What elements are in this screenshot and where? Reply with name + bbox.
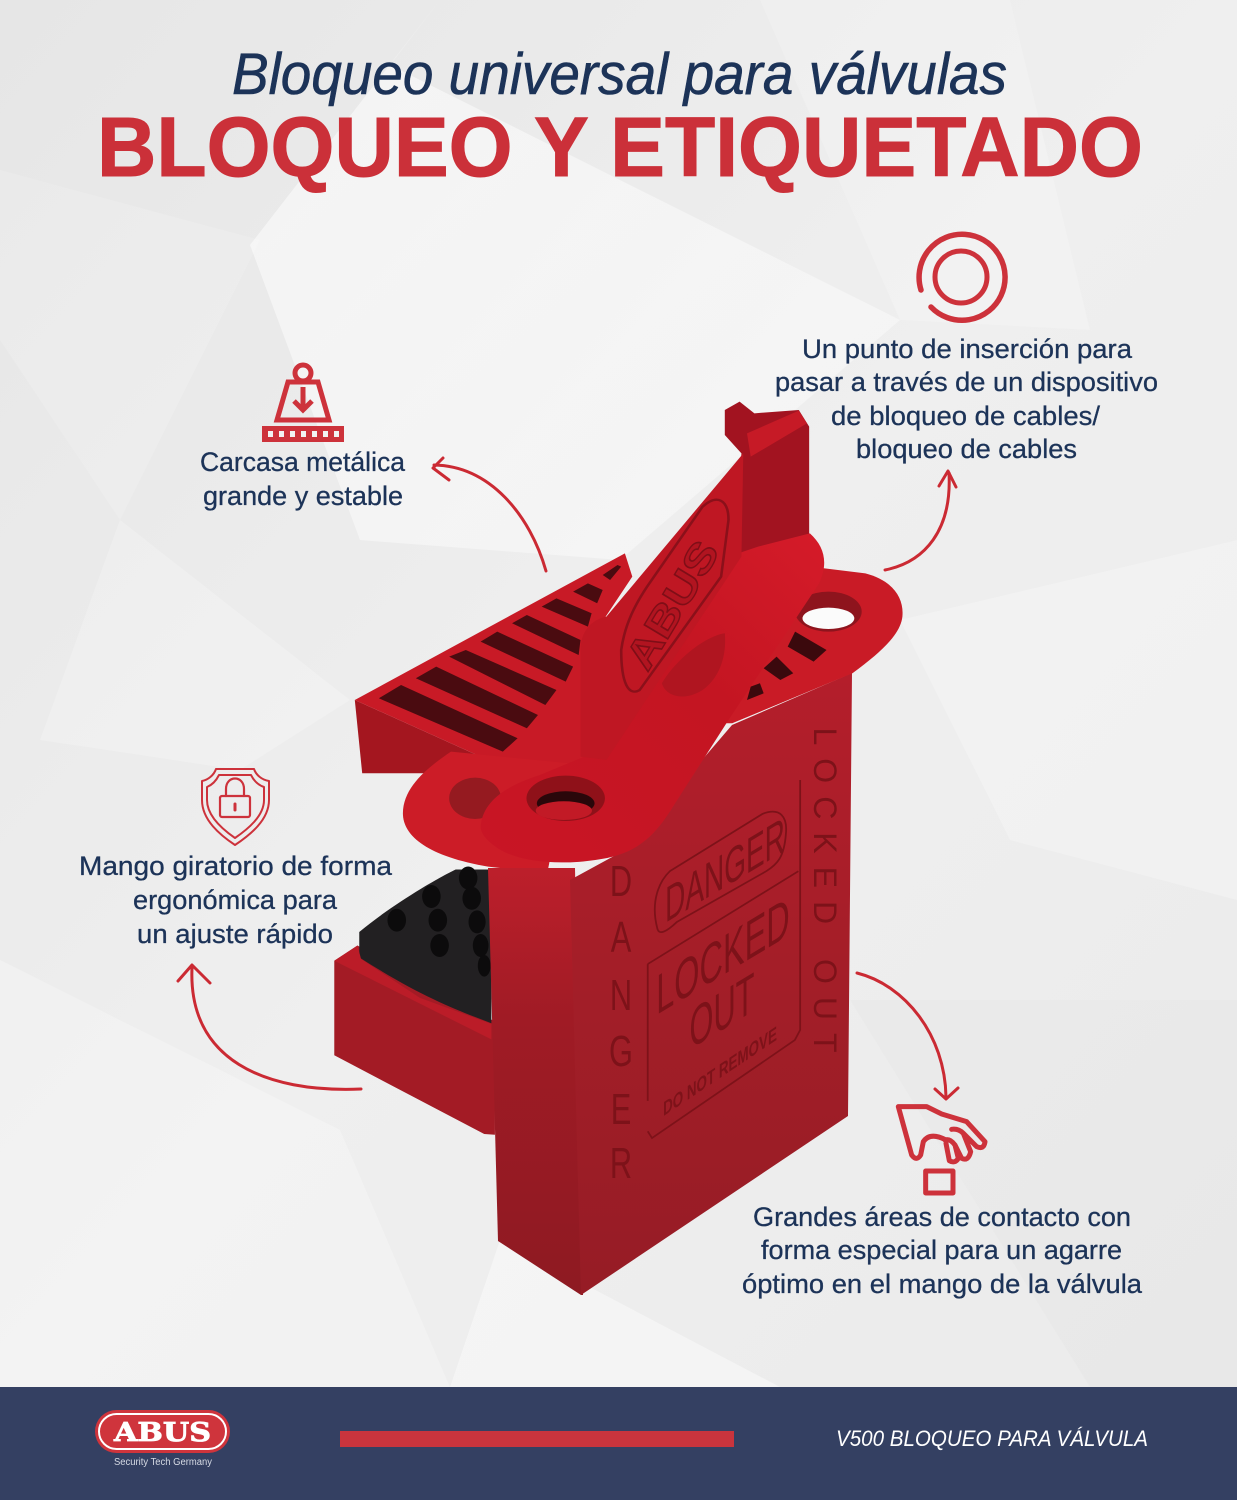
embossed body text: DO NOT REMOVE [663, 1022, 777, 1121]
insertion point text: bloqueo de cables [856, 434, 1077, 464]
ABUS logo [95, 1410, 230, 1468]
icon: concentric rings [919, 234, 1005, 320]
arrow: to insertion point text [885, 471, 956, 570]
ergonomic handle text: ergonómica para [133, 885, 338, 915]
main body side face [488, 868, 583, 1295]
insertion point text: Un punto de inserción para [802, 334, 1133, 364]
rear grid plate [355, 553, 632, 873]
title [97, 42, 1143, 194]
embossed body text: LOCKED [656, 886, 790, 1028]
embossed body text: LOCKED OUT [807, 728, 843, 1052]
title line 2: BLOQUEO Y ETIQUETADO [97, 100, 1143, 194]
arrow: to metal housing text [433, 458, 546, 571]
icon: weight on base [262, 365, 344, 442]
callout: bottom right [742, 1107, 1143, 1299]
embossed body text: A [611, 914, 632, 962]
embossed body text [609, 728, 843, 1188]
embossed panel [648, 780, 800, 1138]
icon: shield with padlock [202, 769, 269, 845]
black rubber grip and base block [334, 866, 495, 1135]
ergonomic handle text [79, 851, 393, 949]
handle blade [580, 453, 743, 760]
embossed body text: N [610, 972, 632, 1020]
callout: top left [200, 365, 406, 511]
red divider bar [340, 1431, 734, 1447]
back right flange [710, 563, 903, 723]
handle base plate [481, 533, 824, 862]
product: red valve lockout device [334, 402, 903, 1295]
embossed handle logo: ABUS [616, 533, 728, 677]
rotating handle [481, 402, 824, 862]
insertion point text: pasar a través de un dispositivo [775, 367, 1158, 397]
callout: left [79, 769, 393, 949]
embossed body text: OUT [690, 959, 754, 1061]
handle back fin [725, 402, 809, 570]
ABUS embossed oval [621, 500, 728, 692]
embossed body text: DANGER [665, 806, 785, 934]
embossed body text: D [610, 858, 632, 906]
metal housing text [200, 447, 406, 511]
arrow: to hand icon [857, 973, 958, 1099]
insertion point text [775, 334, 1158, 464]
insertion point text: de bloqueo de cables/ [831, 401, 1101, 431]
title line 1: Bloqueo universal para válvulas [232, 42, 1007, 107]
embossed body text: G [609, 1028, 633, 1076]
contact areas text: Grandes áreas de contacto con [753, 1202, 1131, 1232]
callout: top right [775, 234, 1158, 464]
lower red base block [334, 946, 495, 1135]
embossed body text: R [610, 1140, 632, 1188]
arrow: to ergonomic handle text [178, 965, 361, 1089]
contact areas text: óptimo en el mango de la válvula [742, 1269, 1143, 1299]
ergonomic handle text: Mango giratorio de forma [79, 851, 393, 881]
footer band [0, 1387, 1237, 1500]
icon: hand grasping block [898, 1107, 985, 1193]
contact areas text [742, 1202, 1143, 1299]
metal housing text: Carcasa metálica [200, 447, 406, 477]
rear rounded flange [403, 752, 569, 873]
product name: V500 BLOQUEO PARA VÁLVULA [836, 1426, 1148, 1451]
ABUS logo: Security Tech Germany [114, 1457, 212, 1468]
main body front face [570, 673, 852, 1295]
embossed body text: E [611, 1086, 631, 1134]
ergonomic handle text: un ajuste rápido [137, 919, 333, 949]
metal housing text: grande y estable [203, 481, 403, 511]
contact areas text: forma especial para un agarre [761, 1235, 1122, 1265]
ABUS logo: ABUS [113, 1418, 211, 1448]
